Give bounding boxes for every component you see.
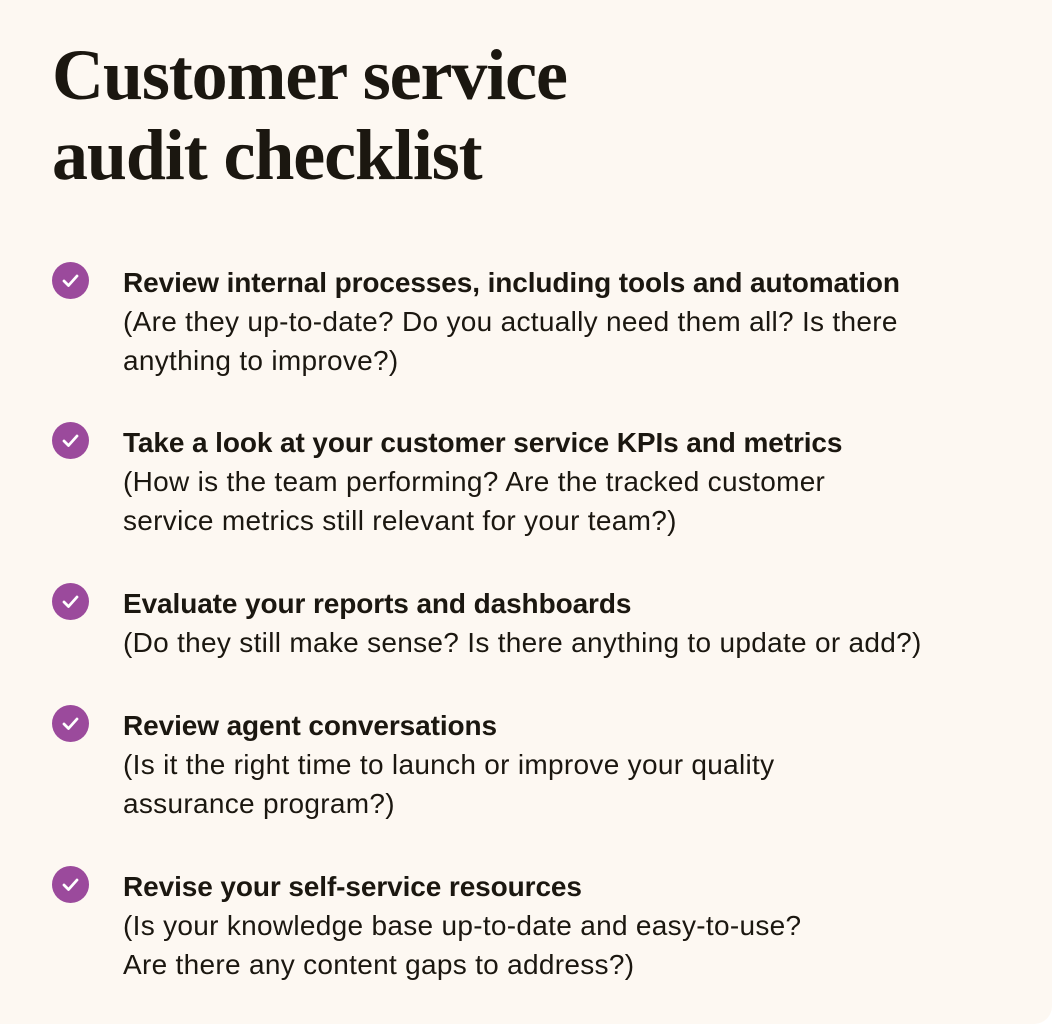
text: item 4: assurance program?) — [123, 788, 395, 819]
title: audit checklist — [52, 115, 482, 195]
text: item 4: (Is it the right time to launch or improve your quality — [123, 749, 774, 780]
item 5 — [52, 866, 801, 980]
icon: check circle — [52, 583, 89, 620]
text: item 4: Review agent conversations — [123, 710, 497, 741]
icon: check circle — [52, 705, 89, 742]
text: item 2 — [123, 427, 842, 536]
title — [52, 35, 567, 195]
text: item 1: Review internal processes, including tools and automation — [123, 267, 900, 298]
text: item 5: Revise your self-service resources — [123, 871, 582, 902]
text: item 2: (How is the team performing? Are the tracked customer — [123, 466, 825, 497]
item 1 — [52, 262, 900, 376]
item 4 — [52, 705, 774, 819]
text: item 2: Take a look at your customer service KPIs and metrics — [123, 427, 842, 458]
text: item 3: (Do they still make sense? Is there anything to update or add?) — [123, 627, 922, 658]
icon: check circle — [52, 422, 89, 459]
text: item 4 — [123, 710, 774, 819]
item 2 — [52, 422, 842, 536]
text: item 1: anything to improve?) — [123, 345, 399, 376]
item 3 — [52, 583, 922, 658]
text: item 3 — [123, 588, 922, 658]
text: item 1: (Are they up-to-date? Do you actually need them all? Is there — [123, 306, 898, 337]
icon: check circle — [52, 262, 89, 299]
title: Customer service — [52, 35, 567, 115]
icon: check circle — [52, 866, 89, 903]
text: item 2: service metrics still relevant for your team?) — [123, 505, 677, 536]
text: item 3: Evaluate your reports and dashboards — [123, 588, 631, 619]
text: item 5: (Is your knowledge base up-to-date and easy-to-use? — [123, 910, 801, 941]
text: item 5 — [123, 871, 801, 980]
text: item 5: Are there any content gaps to address?) — [123, 949, 634, 980]
text: item 1 — [123, 267, 900, 376]
